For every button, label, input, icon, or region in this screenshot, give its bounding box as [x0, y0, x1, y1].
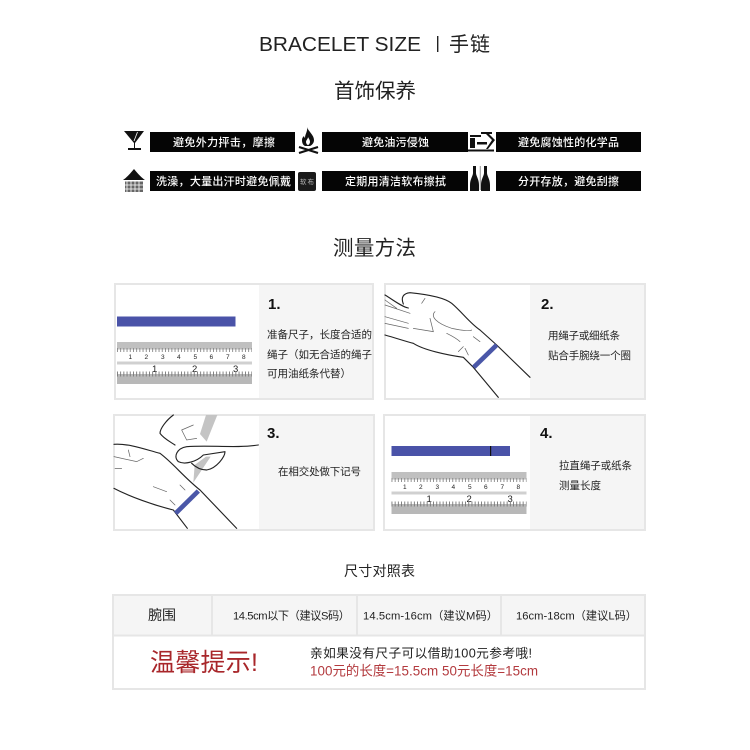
ruler: 3 [508, 494, 513, 505]
ruler: 3 [436, 484, 440, 491]
ruler: 4 [177, 354, 181, 361]
step text: 用绳子或细纸条 [548, 329, 620, 342]
panel: care tips [123, 127, 641, 192]
cell: wrist: 腕围 [148, 607, 176, 623]
step text [548, 329, 631, 362]
tip text: 100元的长度=15.5cm 50元长度=15cm [310, 664, 538, 678]
ruler: 4 [452, 484, 456, 491]
panel: step 2 [385, 284, 645, 399]
step number: 4. [540, 425, 553, 442]
cell: size L: 16cm-18cm（建议L码） [516, 608, 637, 622]
ruler: 2 [192, 364, 197, 375]
ruler: 1 [426, 494, 432, 505]
icon: fire [299, 127, 318, 153]
step number: 3. [267, 425, 280, 442]
ruler: 1 [403, 484, 407, 491]
illustration: marking the band [114, 415, 258, 528]
cell: size S: 14.5cm以下（建议S码） [233, 608, 350, 622]
tip text: 亲如果没有尺子可以借助100元参考哦! [310, 646, 532, 660]
tip text [310, 646, 538, 678]
ruler: 7 [500, 484, 504, 491]
tip bar: avoid impact [150, 132, 295, 152]
size table [113, 595, 645, 689]
step text: 绳子（如无合适的绳子 [267, 348, 372, 361]
ruler: 6 [484, 484, 488, 491]
step text: 准备尺子，长度合适的 [267, 328, 372, 341]
icon: bottles [470, 166, 490, 191]
icon: chemical pot [468, 132, 495, 152]
step text [267, 328, 372, 380]
step text [559, 459, 632, 492]
step text: 测量长度 [559, 479, 602, 492]
ruler: 7 [226, 354, 230, 361]
ruler: 8 [516, 484, 520, 491]
ruler: 2 [466, 494, 472, 505]
ruler [392, 472, 526, 514]
ruler: 6 [210, 354, 214, 361]
title: 手链 [449, 33, 490, 56]
tip bar: separate storage: 分开存放，避免刮擦 [518, 174, 619, 188]
step text: 拉直绳子或纸条 [559, 459, 632, 472]
icon: soft cloth [298, 172, 316, 191]
heading: measuring method: 测量方法 [333, 237, 416, 260]
blue strip with mark [392, 446, 510, 456]
icon: soft cloth: 软布 [300, 177, 314, 186]
ruler: 1 [152, 364, 157, 375]
ruler: 3 [233, 364, 238, 375]
tip bar: avoid oil [322, 132, 468, 152]
panel: step 1 [115, 284, 373, 399]
tip bar: avoid chemicals: 避免腐蚀性的化学品 [518, 135, 619, 149]
panel: step 4 [384, 415, 645, 530]
ruler: 2 [419, 484, 423, 491]
icon: cocktail glass [124, 131, 144, 150]
ruler: 1 [128, 354, 132, 361]
ruler [117, 342, 252, 384]
ruler: 5 [194, 354, 198, 361]
ruler: 8 [242, 354, 246, 361]
tip bar: avoid washing: 洗澡，大量出汗时避免佩戴 [156, 174, 291, 188]
icon: shower [123, 169, 145, 192]
blue strip [117, 316, 236, 326]
tip bar: soft cloth: 定期用清洁软布擦拭 [345, 174, 446, 188]
tip bar: avoid chemicals [496, 132, 641, 152]
step number: 1. [268, 296, 281, 313]
tip bar: avoid impact: 避免外力抨击，摩擦 [173, 135, 275, 149]
panel: step 3 [114, 415, 374, 530]
tip heading: 温馨提示! [150, 649, 258, 677]
tip bar: avoid washing [150, 171, 295, 191]
ruler: 5 [468, 484, 472, 491]
ruler: 2 [144, 354, 148, 361]
tip bar: separate storage [496, 171, 641, 191]
illustration: hand with band [385, 293, 530, 397]
cell: size M: 14.5cm-16cm（建议M码） [363, 608, 498, 622]
ruler: 3 [161, 354, 165, 361]
step text: 在相交处做下记号 [278, 465, 361, 478]
title: BRACELET SIZE [259, 34, 421, 56]
title [259, 33, 490, 56]
heading: jewelry care: 首饰保养 [334, 80, 416, 103]
heading: size chart: 尺寸对照表 [344, 563, 415, 579]
step number: 2. [541, 296, 554, 313]
step text: 贴合手腕绕一个圈 [548, 349, 631, 362]
tip bar: soft cloth [322, 171, 468, 191]
step text: 可用油纸条代替） [267, 367, 351, 380]
tip bar: avoid oil: 避免油污侵蚀 [362, 135, 429, 149]
